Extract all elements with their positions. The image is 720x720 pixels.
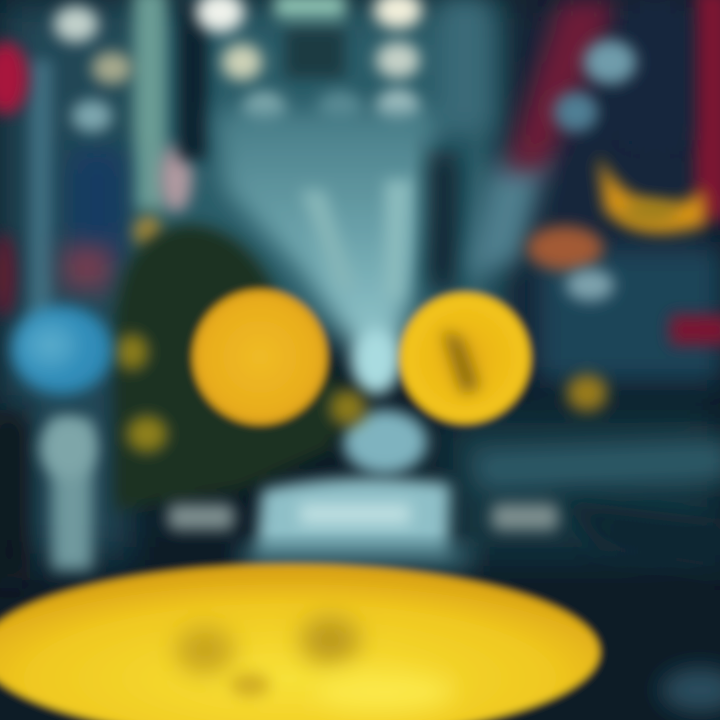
left gold coin	[192, 289, 328, 425]
green dome	[115, 224, 366, 510]
right gold coin with emblem	[399, 292, 531, 424]
large gold coin	[0, 564, 600, 720]
top lights	[54, 0, 422, 192]
left panel: towers and red accents	[0, 0, 208, 330]
bottom-right corner shape	[660, 668, 720, 712]
caption blocks row	[168, 478, 558, 567]
right panel: red and blue structures	[470, 0, 720, 570]
blue sphere on stand	[12, 306, 112, 570]
center light funnel	[215, 0, 550, 474]
